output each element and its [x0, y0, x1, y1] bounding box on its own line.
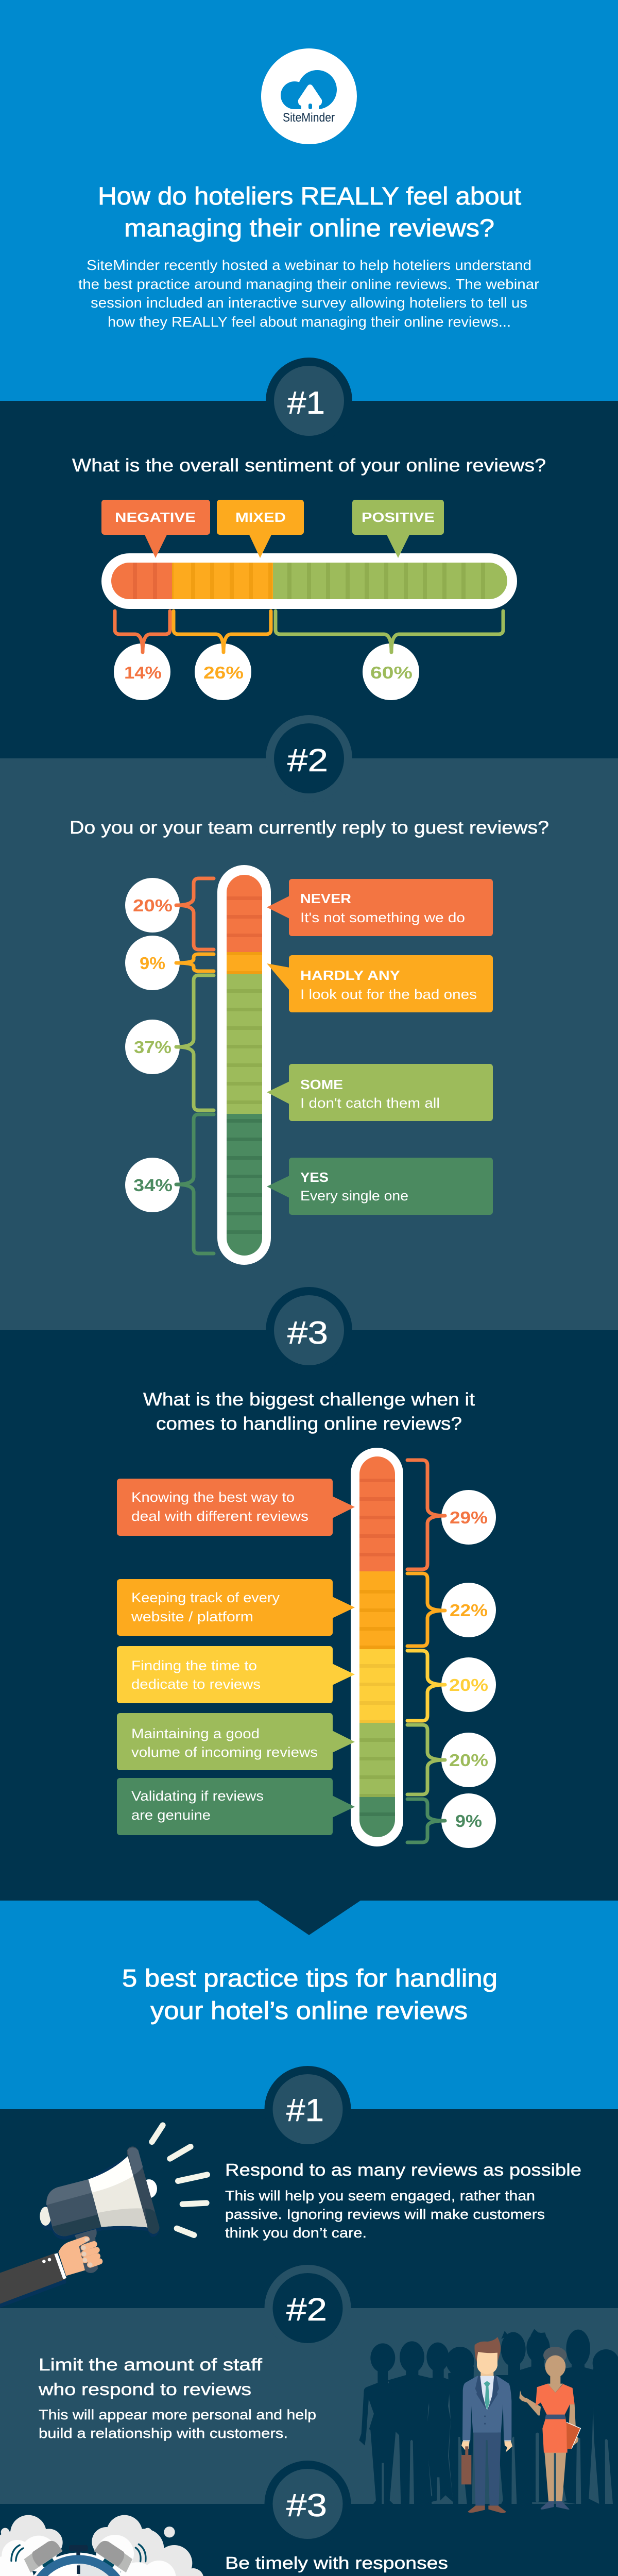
badge: tip #3	[265, 2461, 351, 2547]
panel: survey question 2	[0, 715, 618, 1330]
tip 2 text: build a relationship with customers.	[39, 2426, 288, 2441]
title: managing their online reviews?	[124, 215, 494, 242]
tip 1 text: Respond to as many reviews as possible	[225, 2160, 581, 2179]
tip 3 text: Be timely with responses	[225, 2553, 448, 2572]
stat: 34%	[125, 1114, 214, 1253]
stat: 37%	[125, 975, 214, 1110]
heading: 5 best practice tips: 5 best practice tips for handling	[122, 1965, 497, 1992]
stat: 14%: 14%	[124, 663, 162, 682]
callout: never	[267, 879, 493, 936]
stat: 22%: 22%	[450, 1601, 488, 1620]
tip 1 text: This will help you seem engaged, rather than	[225, 2188, 535, 2204]
icon: businessman and businesswoman	[461, 2337, 580, 2513]
panel: header	[0, 0, 618, 401]
callout: finding the time	[117, 1646, 355, 1703]
badge: tip #3: #3	[286, 2488, 327, 2523]
panel: tip 1	[0, 2066, 618, 2308]
callout: some	[267, 1064, 493, 1121]
badge: #3	[266, 1287, 352, 1374]
callout: keeping track: Keeping track of every	[131, 1590, 280, 1605]
stat: 9%: 9%	[140, 954, 165, 973]
callout: finding the time: Finding the time to	[131, 1658, 257, 1673]
icon: woman	[519, 2347, 580, 2510]
title	[98, 183, 521, 242]
icon: SiteMinder logo	[261, 48, 357, 144]
callout: yes: Every single one	[300, 1188, 408, 1204]
callout: knowing the best way: Knowing the best way to	[131, 1489, 295, 1505]
intro text	[78, 257, 539, 330]
icon: crowd silhouettes	[359, 2329, 618, 2504]
badge: #2	[266, 715, 352, 802]
tip 2 text	[38, 2355, 316, 2441]
tip 1 text	[225, 2160, 581, 2241]
panel: survey question 1	[0, 358, 618, 758]
badge: #2: #2	[287, 743, 328, 778]
stat: 60%	[276, 611, 503, 700]
callout: never: NEVER	[300, 891, 351, 906]
callout: never: It's not something we do	[300, 910, 465, 925]
callout: validating	[117, 1778, 355, 1835]
intro text: SiteMinder recently hosted a webinar to help hoteliers understand	[87, 257, 531, 273]
progress bar: sentiment	[101, 553, 517, 609]
callout: knowing the best way: deal with different reviews	[131, 1509, 308, 1524]
stat: 20% third: 20%	[449, 1675, 488, 1694]
callout: hardly any: HARDLY ANY	[300, 968, 400, 983]
stat: 20%	[125, 878, 214, 950]
heading: question 1: What is the overall sentiment of your online reviews?	[72, 455, 546, 476]
stat: 20%: 20%	[133, 896, 173, 915]
intro text: how they REALLY feel about managing their online reviews...	[108, 314, 511, 330]
stat: 29%	[407, 1460, 496, 1569]
stat: 14%	[114, 611, 170, 700]
callout: maintaining volume	[117, 1713, 355, 1770]
badge: #1	[266, 358, 352, 444]
icon: man	[461, 2337, 512, 2513]
icon: sound rays	[152, 2125, 207, 2235]
stat: 9%	[125, 936, 214, 990]
stat: 22%	[407, 1573, 496, 1646]
badge: tip #1: #1	[286, 2093, 324, 2128]
intro text: the best practice around managing their online reviews. The webinar	[78, 276, 539, 292]
stat: 9% fifth	[407, 1793, 496, 1848]
stat: 20% fourth: 20%	[449, 1751, 488, 1770]
heading: question 3: What is the biggest challenge when it	[143, 1389, 475, 1410]
panel: best practice intro	[0, 1901, 618, 2109]
callout: positive: POSITIVE	[362, 510, 435, 525]
callout: keeping track: website / platform	[131, 1609, 253, 1624]
stat: 37%: 37%	[134, 1038, 171, 1057]
callout: finding the time: dedicate to reviews	[131, 1676, 261, 1692]
callout: some: SOME	[300, 1077, 343, 1092]
stat: 26%	[174, 611, 271, 700]
tip 1 text: think you don’t care.	[225, 2225, 367, 2241]
callout: maintaining volume: Maintaining a good	[131, 1726, 260, 1741]
badge: tip #1	[265, 2066, 351, 2153]
icon: SiteMinder logo: SiteMinder	[283, 111, 335, 125]
callout: mixed	[217, 500, 304, 558]
badge: tip #2	[265, 2265, 351, 2351]
stat: 20% third	[407, 1651, 496, 1721]
arrow: down notch	[258, 1901, 360, 1935]
intro text: session included an interactive survey allowing hoteliers to tell us	[91, 295, 527, 311]
badge: #1: #1	[287, 385, 325, 421]
tip 2 text: who respond to reviews	[38, 2380, 251, 2399]
heading: 5 best practice tips: your hotel’s online reviews	[150, 1997, 468, 2025]
callout: validating: Validating if reviews	[131, 1788, 264, 1804]
icon: alarm clock rocket	[0, 2515, 204, 2576]
panel: tip 2	[0, 2265, 618, 2504]
callout: keeping track	[117, 1579, 355, 1636]
callout: maintaining volume: volume of incoming reviews	[131, 1744, 318, 1760]
badge: tip #2: #2	[286, 2292, 327, 2328]
panel: tip 3	[0, 2461, 618, 2576]
tip 2 text: Limit the amount of staff	[39, 2355, 263, 2374]
tip 1 text: passive. Ignoring reviews will make customers	[225, 2207, 545, 2222]
heading: question 3	[143, 1389, 475, 1434]
badge: #3: #3	[287, 1315, 328, 1351]
callout: positive	[352, 500, 444, 558]
panel: survey question 3	[0, 1287, 618, 1901]
heading: 5 best practice tips	[122, 1965, 497, 2025]
callout: validating: are genuine	[131, 1807, 211, 1823]
title: How do hoteliers REALLY feel about	[98, 183, 521, 210]
heading: question 2: Do you or your team currently reply to guest reviews?	[70, 818, 549, 838]
thermometer bar: challenges	[351, 1448, 403, 1846]
thermometer bar: replies	[217, 865, 271, 1265]
heading: question 3: comes to handling online reviews?	[156, 1414, 462, 1434]
stat: 9% fifth: 9%	[455, 1811, 482, 1831]
stat: 29%: 29%	[450, 1508, 488, 1527]
callout: yes: YES	[300, 1170, 329, 1185]
callout: negative: NEGATIVE	[115, 510, 196, 525]
stat: 34%: 34%	[133, 1176, 173, 1195]
stat: 26%: 26%	[203, 663, 244, 682]
stat: 20% fourth	[407, 1725, 496, 1794]
callout: hardly any: I look out for the bad ones	[300, 987, 477, 1002]
tip 2 text: This will appear more personal and help	[39, 2407, 316, 2422]
callout: knowing the best way	[117, 1479, 355, 1536]
callout: negative	[101, 500, 210, 558]
callout: mixed: MIXED	[235, 510, 286, 525]
callout: yes	[267, 1158, 493, 1215]
stat: 60%: 60%	[370, 663, 413, 682]
callout: hardly any	[267, 955, 493, 1012]
callout: some: I don't catch them all	[300, 1095, 440, 1111]
icon: megaphone	[0, 2125, 207, 2308]
